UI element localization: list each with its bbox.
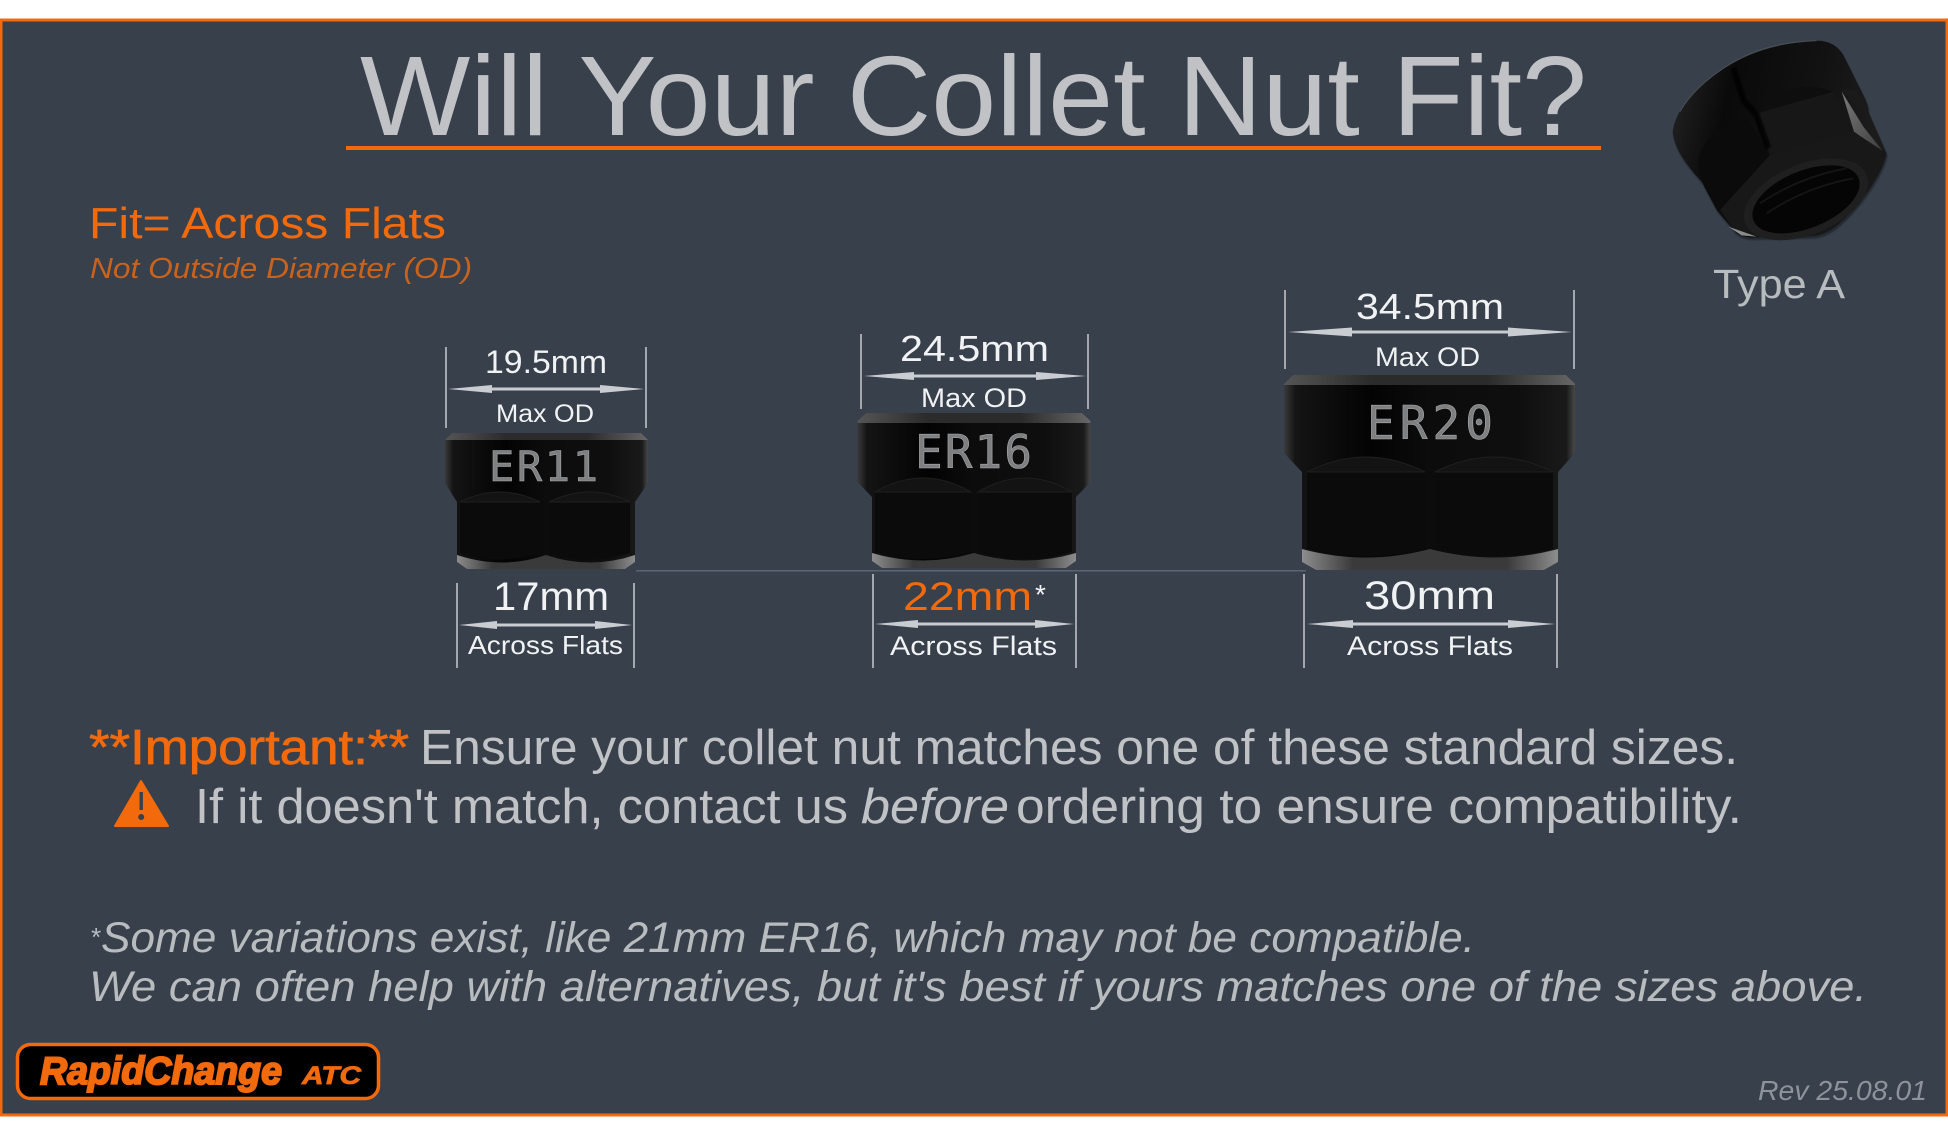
revision label: Rev 25.08.01 bbox=[1758, 1075, 1927, 1106]
logo: RapidChange ATC: ATC bbox=[301, 1062, 362, 1090]
nut: ER20: ER20 bbox=[1367, 396, 1493, 450]
dimension: ER20 max OD bbox=[1285, 286, 1574, 372]
dimension: ER11 across flats: Across Flats bbox=[468, 630, 623, 660]
dimension: ER16 across flats: 22mm bbox=[903, 575, 1032, 619]
dimension: ER11 across flats: 17mm bbox=[493, 575, 609, 619]
dimension: ER20 max OD: 34.5mm bbox=[1356, 286, 1504, 327]
dimension: ER20 across flats: Across Flats bbox=[1347, 631, 1513, 661]
nut: ER16 bbox=[858, 413, 1090, 568]
subheading: not outside diameter: Not Outside Diameter (OD) bbox=[90, 253, 472, 285]
text: contact before ordering bbox=[195, 780, 1742, 834]
group: ER20 sizes bbox=[1284, 286, 1575, 668]
nut: ER11: ER11 bbox=[489, 442, 598, 491]
footnote bbox=[89, 914, 1867, 1011]
dimension: ER16 max OD: Max OD bbox=[921, 383, 1027, 413]
nut: ER20 bbox=[1284, 375, 1575, 570]
text: important label: **Important:** bbox=[89, 721, 409, 775]
dimension: ER11 max OD: Max OD bbox=[496, 400, 594, 428]
dimension: ER16 across flats bbox=[873, 574, 1076, 668]
logo: RapidChange ATC: RapidChange bbox=[40, 1050, 282, 1093]
dimension: ER20 max OD: Max OD bbox=[1375, 342, 1480, 372]
baseline rule bbox=[636, 570, 1306, 572]
text: contact before ordering: If it doesn't match, contact us bbox=[195, 780, 848, 834]
dimension: ER16 max OD: 24.5mm bbox=[900, 328, 1049, 369]
group: ER11 sizes bbox=[445, 344, 648, 668]
dimension: ER11 max OD bbox=[446, 344, 646, 428]
logo: RapidChange ATC bbox=[18, 1044, 378, 1098]
label: type A: Type A bbox=[1713, 261, 1846, 307]
dimension: ER11 across flats bbox=[457, 575, 634, 668]
dimension: ER20 across flats: 30mm bbox=[1364, 574, 1495, 618]
callout: important notice bbox=[89, 721, 1742, 834]
text: standard sizes: Ensure your collet nut matches one of these standard sizes. bbox=[420, 721, 1738, 775]
dimension: ER16 across flats: * bbox=[1035, 579, 1046, 610]
footnote: We can often help with alternatives, but it's best if yours matches one of the sizes above. bbox=[89, 963, 1867, 1011]
text: contact before ordering: ordering to ensure compatibility. bbox=[1016, 780, 1742, 834]
dimension: ER11 max OD: 19.5mm bbox=[485, 344, 607, 380]
nut: ER16: ER16 bbox=[915, 425, 1032, 479]
dimension: ER20 across flats bbox=[1304, 574, 1557, 668]
dimension: ER16 max OD bbox=[861, 328, 1088, 413]
icon: warning triangle bbox=[115, 781, 168, 826]
footnote: Some variations exist, like 21mm ER16, which may not be compatible. bbox=[101, 914, 1475, 962]
text: contact before ordering: before bbox=[861, 780, 1009, 834]
heading: fit equals across flats: Fit= Across Flats bbox=[89, 199, 446, 248]
icon: type A collet nut bbox=[1673, 41, 1888, 257]
group: ER16 sizes bbox=[858, 328, 1090, 668]
title: Will Your Collet Nut Fit? bbox=[360, 33, 1587, 159]
nut: ER11 bbox=[445, 433, 648, 569]
footnote: * bbox=[90, 922, 101, 952]
dimension: ER16 across flats: Across Flats bbox=[890, 631, 1057, 661]
